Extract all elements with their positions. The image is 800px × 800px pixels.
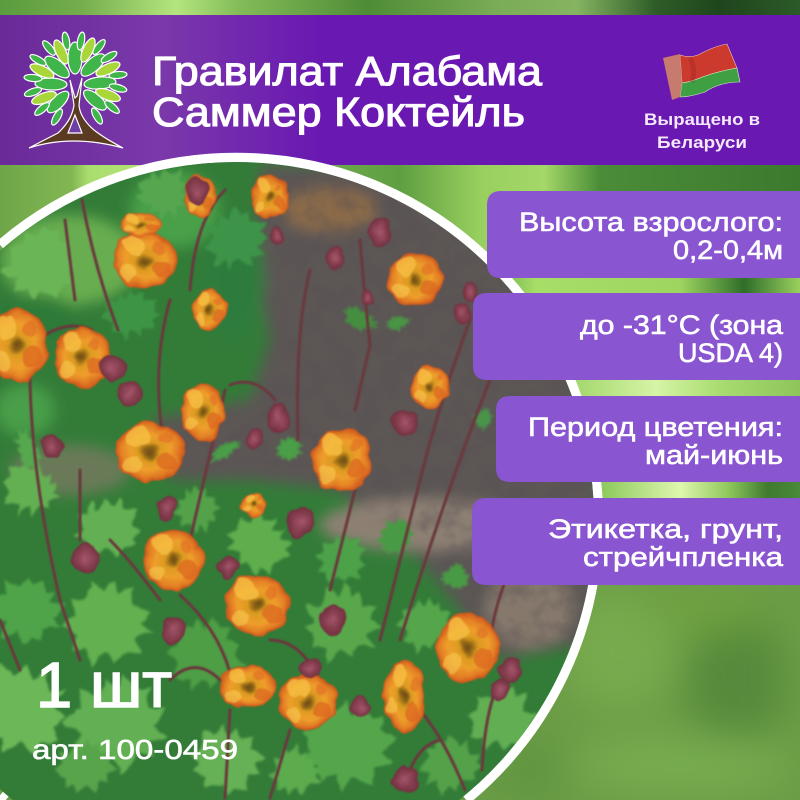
panel: height: 0,2-0,4м (673, 235, 783, 265)
logo: tree (23, 32, 128, 148)
panel: bloom period (496, 396, 800, 482)
trunk (29, 78, 123, 148)
soil texture (305, 188, 576, 642)
grown in Belarus label: Выращено в (644, 111, 760, 129)
panel: bloom period: Период цветения: (528, 412, 783, 442)
panel: bloom period: май-июнь (645, 440, 783, 470)
title: Саммер Коктейль (152, 89, 525, 135)
flower heads (0, 175, 500, 740)
panel: package contents: стрейчпленка (583, 542, 784, 572)
circular photo: orange geum flowers (0, 150, 610, 800)
panel: height: Высота взрослого: (519, 207, 783, 237)
panel: hardiness: USDA 4) (678, 338, 783, 368)
panel: hardiness: до -31°C (зона (580, 310, 784, 340)
header band (0, 15, 800, 165)
panel: package contents (472, 498, 800, 585)
title: Гравилат Алабама (152, 48, 542, 94)
leaves (0, 168, 548, 800)
title (152, 48, 542, 135)
panel: package contents: Этикетка, грунт, (548, 514, 783, 544)
red buds (40, 178, 521, 794)
grown in Belarus label (644, 111, 760, 152)
quantity label: 1 шт (36, 649, 172, 721)
panel: hardiness (473, 293, 800, 380)
article number: арт. 100-0459 (32, 734, 238, 765)
grown in Belarus label: Беларуси (657, 134, 747, 152)
white ring (0, 158, 598, 800)
stems (0, 190, 545, 798)
icon: Belarus flag (663, 44, 740, 100)
panel: height (487, 191, 800, 278)
